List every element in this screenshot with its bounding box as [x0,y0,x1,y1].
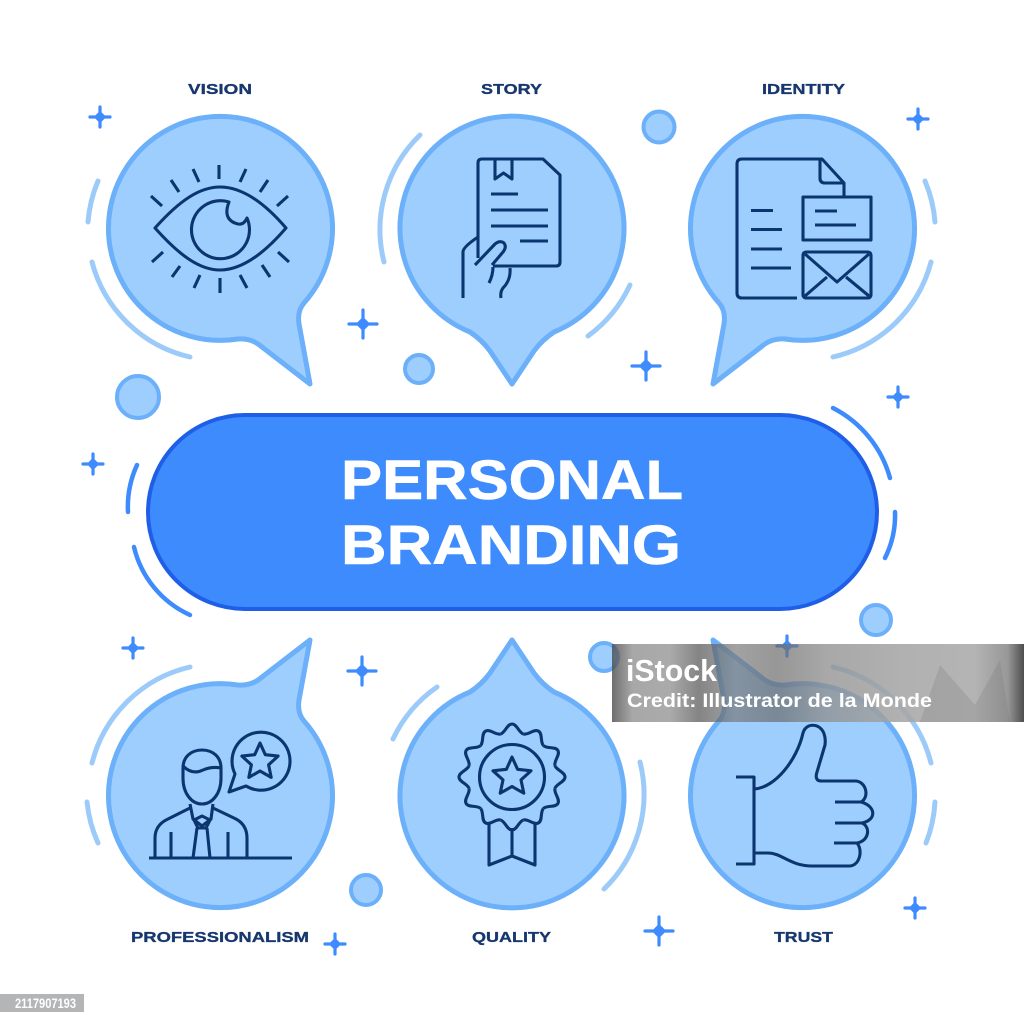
sparkle stars [83,107,928,954]
central pill: personal branding [148,415,877,609]
pill heading: BRANDING [341,513,681,576]
label: professionalism: PROFESSIONALISM [131,930,309,946]
speech bubble: identity [691,116,915,384]
icon: documents and envelope [737,159,871,298]
label: vision: VISION [188,82,252,98]
icon: document in hand [463,159,560,298]
speech bubble: quality [400,640,624,908]
accent arcs around pill [128,408,895,615]
image id tag: 2117907193 [15,996,76,1011]
speech bubble: professionalism [108,640,332,908]
watermark logo: iStock [626,653,718,688]
pill heading: PERSONAL [341,448,682,511]
speech bubble: trust [691,640,915,908]
accent arcs around bubbles [87,135,935,889]
speech bubble: story [400,116,624,384]
icon: award rosette [459,724,565,865]
label: quality: QUALITY [472,930,551,946]
icon: thumbs up [736,725,873,866]
stock watermark band [612,644,1024,722]
decorative circles [117,112,891,905]
label: trust: TRUST [774,930,833,946]
speech bubble: vision [108,116,332,384]
image id tag [0,994,84,1012]
watermark credit: Credit: Illustrator de la Monde [627,690,932,712]
icon: eye [151,165,289,293]
label: identity: IDENTITY [762,82,845,98]
label: story: STORY [481,82,542,98]
icon: businessman with star speech bubble [149,732,292,858]
